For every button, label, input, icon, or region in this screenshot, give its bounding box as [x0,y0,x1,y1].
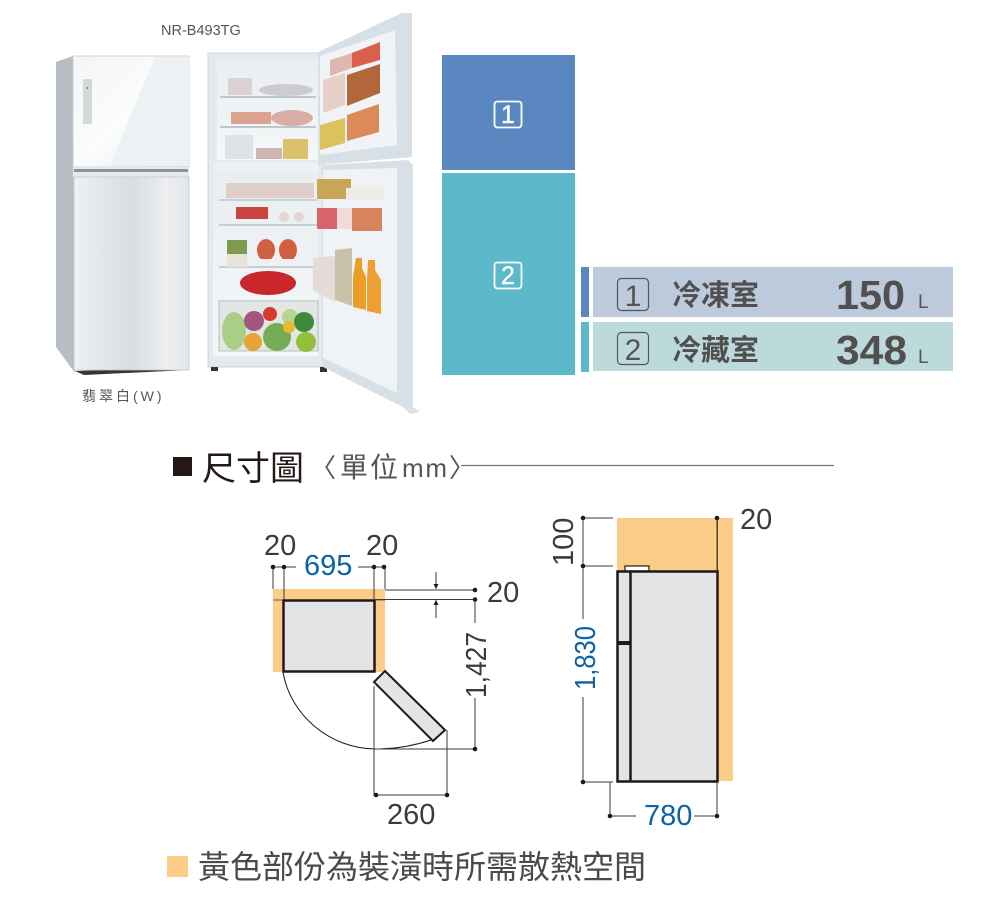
heading: dimension diagram: 單位 [340,452,400,483]
block: refrigerator: 2 [501,262,515,290]
lower door [74,177,189,370]
side view diagram: 1,830 [570,626,602,690]
red casserole pot [240,271,296,295]
row: freezer capacity [581,267,953,318]
top view diagram: 1,427 [461,632,493,698]
heading: dimension diagram: 〉 [449,453,475,483]
top view diagram: 20 [487,577,519,609]
side panel [56,56,75,373]
feet [211,367,218,371]
top view diagram: 20 [366,530,398,562]
open refrigerator [208,13,420,414]
freezer shelves [220,96,316,98]
side view diagram [548,504,772,832]
block: freezer [442,55,575,170]
body outline [284,600,374,672]
side view diagram: 780 [644,800,692,832]
row: freezer capacity: 150 [836,272,905,318]
labels: 100 [548,518,580,566]
row: refrigerator capacity: 2 [625,334,641,367]
block: freezer: 1 [501,101,515,129]
dimension lines [583,518,717,816]
row: refrigerator capacity: L [918,347,929,368]
heading: dimension diagram: 〈 [310,453,336,483]
labels: 20 [264,530,296,562]
door swing arc [283,672,431,749]
upper door open [318,13,412,165]
caption: colour: 翡翠白(W) [82,388,165,404]
row: freezer capacity: L [918,292,929,313]
row: freezer capacity: 冷凍室 [672,279,759,312]
hinge cover [625,566,649,571]
door gap [73,167,189,177]
clearance zone [617,518,733,781]
control panel [83,79,92,124]
note: yellow clearance legend: 黃色部份為裝潢時所需散熱空間 [198,849,646,885]
block: refrigerator [442,173,575,375]
heading: dimension diagram [173,450,834,488]
model name: NR-B493TG [161,23,241,39]
upper door [73,56,189,167]
freezer food [228,78,252,95]
cabinet [208,53,323,367]
top view diagram: 695 [304,550,352,582]
refrigerator body [618,572,718,782]
row: refrigerator capacity: 348 [836,327,907,373]
row: refrigerator capacity: 冷藏室 [672,334,759,367]
door shadow [403,407,420,414]
fridge food [226,183,314,198]
juice bottles [353,258,366,310]
side view diagram: 20 [740,504,772,536]
heading: dimension diagram: mm [402,453,447,483]
vegetable drawer [219,301,318,351]
fridge shelves [219,199,317,201]
top view diagram [264,530,519,831]
lower door open [323,160,413,407]
heading: dimension diagram: 尺寸圖 [202,450,304,488]
open door [374,671,445,741]
row: freezer capacity: 1 [625,280,641,313]
clearance zone [273,589,385,672]
row: refrigerator capacity [581,322,953,373]
dimension lines [273,567,475,795]
closed refrigerator [56,56,189,375]
top view diagram: 260 [387,799,435,831]
